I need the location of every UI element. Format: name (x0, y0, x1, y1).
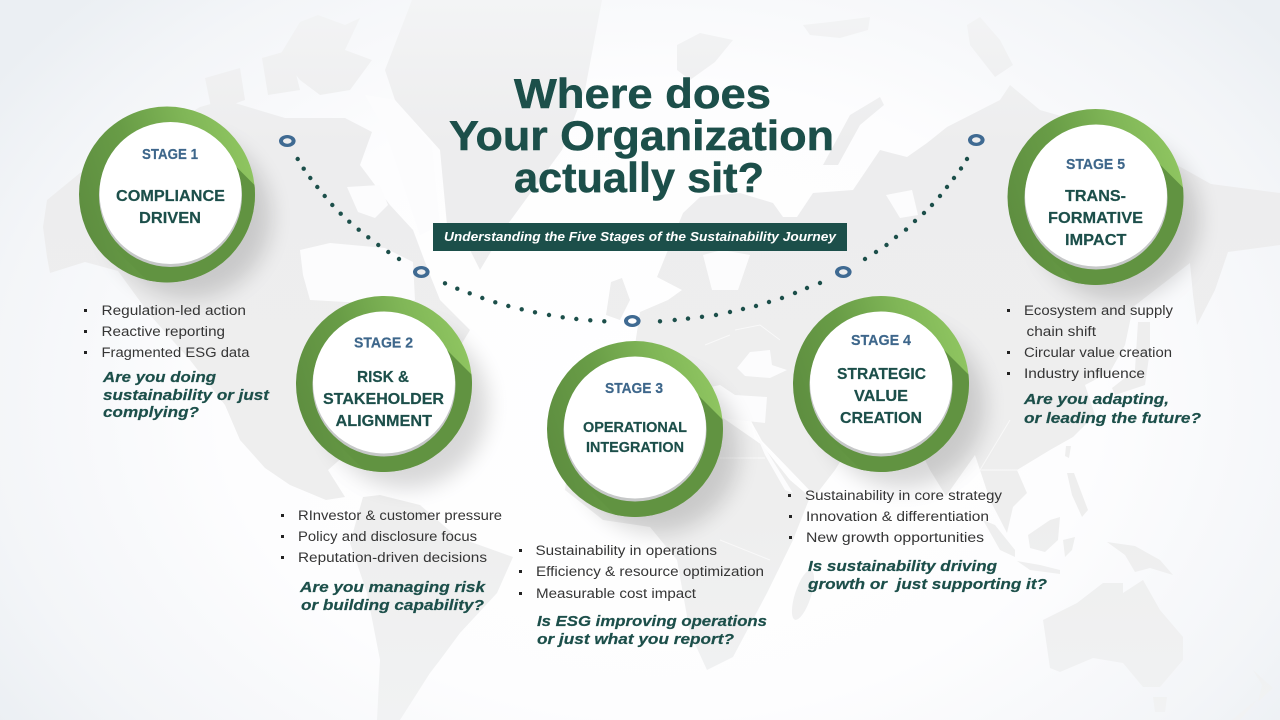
stage 2 badge (296, 296, 504, 504)
stage 4 badge: CREATION (840, 410, 922, 427)
stage 2 bullet list (281, 508, 502, 565)
stage 5 badge: IMPACT (1065, 232, 1127, 249)
stage 3 question: or just what you report? (537, 631, 734, 648)
stage 2 bullet list: Reputation-driven decisions (298, 550, 487, 565)
stage 2 badge: STAGE 2 (354, 334, 413, 352)
stage 1 bullet list: Reactive reporting (102, 324, 225, 339)
stage 3 bullet list: Measurable cost impact (536, 586, 696, 601)
stage 3 question (537, 613, 767, 648)
stage 1 bullet list (84, 303, 250, 360)
stage 3 badge (547, 341, 755, 549)
country borders (705, 325, 1020, 560)
stage 4 bullet list (788, 488, 1002, 545)
stage 1 badge (79, 106, 287, 314)
stage 5 bullet list: Circular value creation (1024, 345, 1172, 360)
stage 4 badge (793, 296, 1001, 504)
stage 5 bullet list: chain shift (1026, 324, 1096, 339)
panel: stage 2 (281, 296, 504, 614)
stage 5 badge: FORMATIVE (1048, 210, 1143, 227)
stage 5 bullet list (1007, 303, 1173, 381)
stage 5 badge (1008, 109, 1216, 317)
stage 1 badge: STAGE 1 (142, 146, 198, 163)
stage 2 badge: ALIGNMENT (336, 413, 432, 430)
title: Where does (514, 70, 771, 117)
stage 2 badge: STAKEHOLDER (323, 391, 444, 408)
stage 4 bullet list: Sustainability in core strategy (805, 488, 1002, 503)
stage 1 question: complying? (103, 404, 199, 421)
subtitle banner: Understanding the Five Stages of the Sustainability Journey (444, 229, 837, 244)
stage 1 badge: COMPLIANCE (116, 188, 225, 205)
title: actually sit? (514, 154, 764, 201)
stage 3 bullet list (519, 543, 764, 601)
stage 4 bullet list: Innovation & differentiation (806, 509, 989, 524)
stage 5 badge: STAGE 5 (1066, 156, 1125, 173)
path markers (279, 134, 985, 327)
stage 1 question: Are you doing (102, 369, 216, 386)
panel: stage 4 (788, 296, 1047, 593)
stage 2 question: Are you managing risk (299, 579, 486, 596)
stage 1 bullet list: Fragmented ESG data (102, 345, 250, 360)
stage 2 question (299, 579, 486, 614)
stage 4 bullet list: New growth opportunities (806, 530, 984, 545)
stage 4 badge: STRATEGIC (837, 366, 926, 383)
stage 3 badge: OPERATIONAL (583, 420, 687, 436)
stage 5 question: or leading the future? (1024, 410, 1201, 427)
stage 3 bullet list: Sustainability in operations (536, 543, 717, 558)
dotted path: stage 1 to 2 (296, 157, 401, 261)
stage 2 bullet list: RInvestor & customer pressure (298, 508, 502, 523)
stage 4 question: growth or just supporting it? (807, 576, 1047, 593)
subtitle banner (433, 223, 847, 251)
stage 5 question: Are you adapting, (1023, 391, 1169, 408)
stage 5 bullet list: Industry influence (1024, 366, 1145, 381)
stage 3 badge: INTEGRATION (586, 440, 684, 456)
stage 1 question (102, 369, 270, 421)
dotted path: stage 4 to 5 (863, 157, 969, 261)
stage 2 bullet list: Policy and disclosure focus (298, 529, 477, 544)
stage 5 badge: TRANS- (1065, 188, 1126, 205)
stage 4 badge: STAGE 4 (851, 332, 912, 349)
stage 1 question: sustainability or just (103, 387, 270, 404)
stage 4 question: Is sustainability driving (808, 558, 997, 575)
panel: stage 5 (1007, 109, 1216, 427)
stage 2 badge: RISK & (357, 369, 409, 386)
dotted path: stage 2 to 3 (443, 281, 606, 323)
title: Your Organization (449, 112, 834, 159)
panel: stage 3 (519, 341, 767, 648)
stage 5 bullet list: Ecosystem and supply (1024, 303, 1173, 318)
stage 3 question: Is ESG improving operations (537, 613, 767, 630)
dotted path: stage 3 to 4 (658, 281, 822, 323)
stage 3 badge: STAGE 3 (605, 380, 663, 397)
stage 1 bullet list: Regulation-led action (102, 303, 246, 318)
stage 1 badge: DRIVEN (139, 210, 201, 227)
stage 3 bullet list: Efficiency & resource optimization (536, 564, 764, 579)
panel: stage 1 (79, 106, 287, 421)
water bodies (300, 95, 918, 493)
stage 4 question (807, 558, 1047, 593)
title (449, 70, 834, 201)
stage 4 badge: VALUE (854, 388, 908, 405)
stage 2 question: or building capability? (301, 597, 484, 614)
stage 5 question (1023, 391, 1201, 427)
